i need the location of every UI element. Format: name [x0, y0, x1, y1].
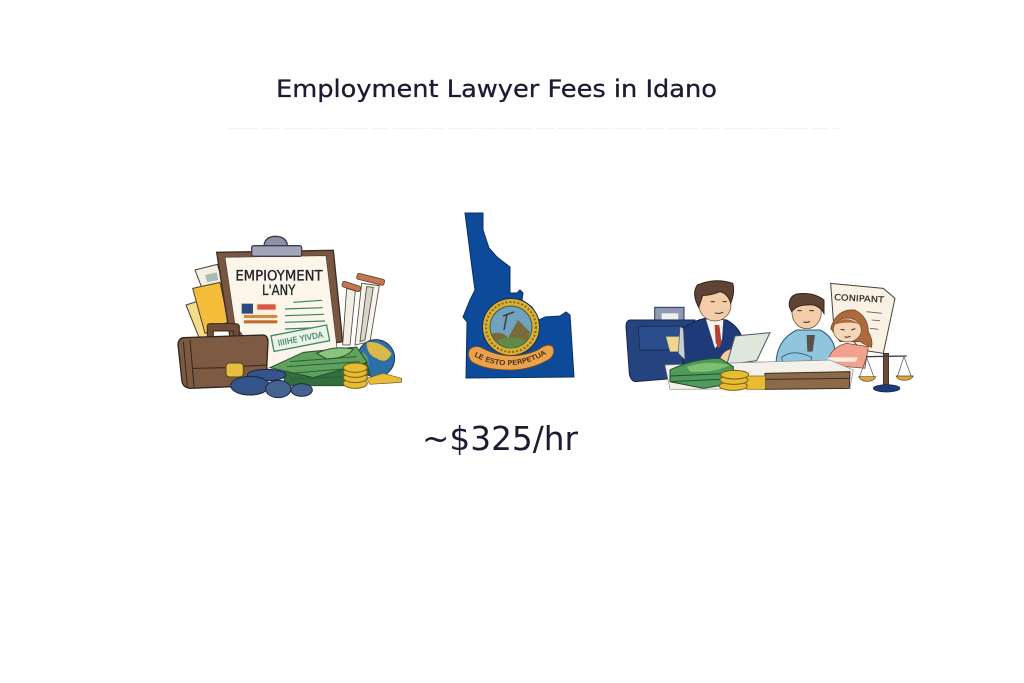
figure: lawyer: [678, 281, 743, 367]
illustration: employment law paperwork: [178, 236, 402, 398]
illustration: lawyer meeting clients: [626, 281, 913, 392]
icon: background papers: [186, 264, 228, 340]
icon: globe: [357, 340, 395, 377]
banner with motto: LE ESTO PERPETUA: [474, 350, 546, 366]
icon: clipboard: L'ANY: [262, 283, 296, 299]
banner with motto: [468, 344, 554, 370]
title: Employment Lawyer Fees in Idano: [276, 75, 717, 103]
face details: [711, 302, 727, 314]
icon: clipboard: [217, 236, 343, 372]
icon: banknotes: [270, 347, 370, 386]
icon: state seal: [482, 298, 540, 356]
icon: flag: [242, 304, 277, 324]
face details: [797, 311, 814, 322]
icon: dark stones: [231, 369, 312, 398]
figure: male client: [776, 293, 835, 365]
icon: briefcase: [178, 324, 268, 388]
clipboard heading: EMPIOYMENT: [235, 268, 323, 284]
document: complaint: CONIPANT: [834, 292, 885, 305]
icon: blue briefcase: [626, 307, 695, 382]
icon: coin stack: [343, 363, 367, 388]
figure: female client: [827, 310, 872, 368]
face details: [841, 329, 855, 337]
stamp: IIIIHE YIVDA: [277, 330, 324, 348]
map: Idaho state flag: [462, 212, 574, 378]
icon: tablet: [727, 333, 770, 365]
document: complaint: [831, 283, 895, 353]
icon: scales of justice: [859, 353, 913, 392]
hourly rate figure: ~$325/hr: [422, 419, 578, 458]
icon: table with money and coins: [665, 358, 853, 390]
icon: crutches: [342, 273, 385, 345]
